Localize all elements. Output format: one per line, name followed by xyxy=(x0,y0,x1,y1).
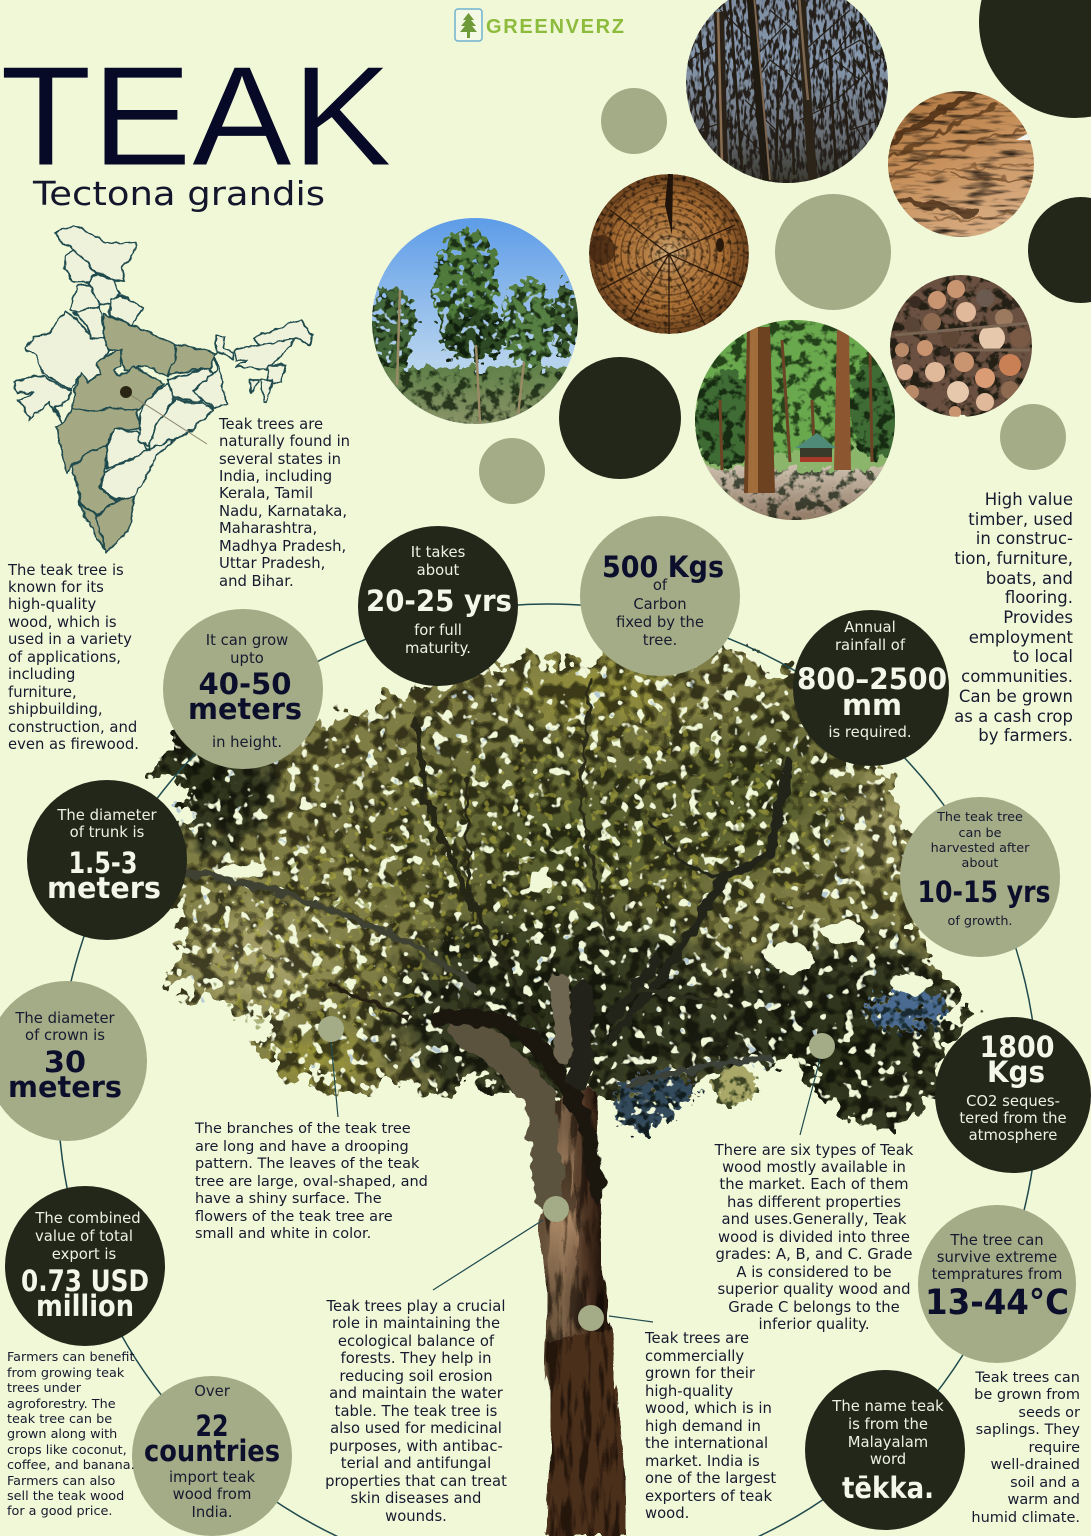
text: growing conditions: seeds or xyxy=(1018,1405,1080,1421)
tree: branches xyxy=(186,680,790,1195)
photo: teak bark texture xyxy=(885,88,1037,240)
stat: tree height xyxy=(163,609,323,769)
stat: name origin: word xyxy=(870,1451,906,1468)
text: commercial demand: high demand in xyxy=(645,1418,761,1435)
text: ecological role: terial and antifungal xyxy=(341,1455,491,1472)
text: uses of teak wood: shipbuilding, xyxy=(8,701,103,718)
text: agroforestry benefits: agroforestry. The xyxy=(7,1397,116,1412)
stat: harvest time: about xyxy=(962,856,998,871)
text: branches and leaves: The branches of the teak tree xyxy=(194,1121,411,1137)
text: growing conditions: require xyxy=(1028,1440,1080,1456)
text: natural range in India: Maharashtra, xyxy=(219,520,317,537)
tree: large open gaps xyxy=(214,862,930,995)
text: growing conditions: humid climate. xyxy=(971,1510,1080,1526)
text: growing conditions: Teak trees can xyxy=(974,1370,1080,1386)
text: natural range in India: naturally found in xyxy=(219,433,350,450)
tree: yellow-green leaf highlights xyxy=(220,700,860,1060)
stat: name origin: tēkka. xyxy=(842,1471,934,1505)
stat: time to maturity: It takes xyxy=(411,544,465,561)
text: economic value: High value xyxy=(985,490,1073,509)
text: uses of teak wood: furniture, xyxy=(8,684,77,701)
stat: time to maturity: about xyxy=(417,562,460,579)
stat: temperature range: The tree can xyxy=(949,1232,1044,1249)
photo: bare forest trees xyxy=(686,0,888,184)
text: economic value: Provides xyxy=(1003,608,1073,627)
stat: carbon fixed: 500 Kgs xyxy=(602,550,724,584)
stat: name origin: is from the xyxy=(848,1416,928,1433)
text: natural range in India: several states in xyxy=(219,451,341,468)
text: types of teak wood: Grade C belongs to the xyxy=(728,1299,900,1316)
text: ecological role: properties that can treat xyxy=(325,1473,507,1490)
text: natural range in India: Madhya Pradesh, xyxy=(219,538,346,555)
stat: name origin: The name teak xyxy=(831,1398,944,1415)
text: economic value: flooring. xyxy=(1005,588,1073,607)
stat: trunk diameter: The diameter xyxy=(56,807,158,824)
tree: trunk xyxy=(538,1090,627,1536)
stat: crown diameter: The diameter xyxy=(14,1010,116,1027)
stat: temperature range xyxy=(918,1205,1076,1363)
text: commercial demand: wood, which is in xyxy=(645,1400,772,1417)
text: growing conditions: be grown from xyxy=(974,1387,1080,1403)
stat: harvest time: 10-15 yrs xyxy=(918,875,1050,909)
callout dot: wood types xyxy=(800,1033,835,1135)
stat: harvest time: can be xyxy=(958,826,1002,841)
stat: temperature range: 13-44°C xyxy=(925,1283,1069,1323)
text: natural range in India: Nadu, Karnataka, xyxy=(219,503,347,520)
decorative circle: large sage xyxy=(775,194,891,310)
text: growing conditions: saplings. They xyxy=(976,1422,1080,1438)
stat: crown diameter: meters xyxy=(8,1070,122,1104)
stat: tree height: upto xyxy=(230,650,264,667)
stat: export value: 0.73 USD xyxy=(21,1264,149,1298)
text: natural range in India: and Bihar. xyxy=(219,573,294,590)
stat: time to maturity: maturity. xyxy=(405,640,471,657)
stat: CO2 sequestered: atmosphere xyxy=(969,1127,1057,1144)
text: natural range in India: Kerala, Tamil xyxy=(219,485,313,502)
stat: harvest time xyxy=(900,797,1060,957)
stat: time to maturity: 20-25 yrs xyxy=(366,584,512,618)
tree: dark blue shadow leaves xyxy=(615,1070,700,1135)
text: ecological role: forests. They help in xyxy=(341,1350,491,1367)
stat: annual rainfall: Annual xyxy=(844,619,896,636)
tree: small pale cluster right of trunk xyxy=(713,1065,757,1105)
decorative circle: top-right dark xyxy=(979,0,1091,118)
stat: annual rainfall: rainfall of xyxy=(835,637,906,654)
callout dot: ecology xyxy=(433,1196,569,1290)
stat: annual rainfall: mm xyxy=(842,688,902,722)
stat: tree height: meters xyxy=(188,692,302,726)
stat: time to maturity: for full xyxy=(414,622,462,639)
text: ecological role: also used for medicinal xyxy=(330,1420,502,1437)
text: commercial demand: grown for their xyxy=(645,1365,756,1382)
text: economic value: employment xyxy=(969,628,1074,647)
text: commercial demand: wood. xyxy=(645,1505,689,1522)
text: agroforestry benefits: Farmers can benefit xyxy=(7,1350,135,1365)
text: types of teak wood: superior quality wood and xyxy=(717,1281,911,1298)
stat: name origin xyxy=(805,1370,965,1530)
text: ecological role: skin diseases and xyxy=(351,1490,481,1507)
text: types of teak wood: wood mostly available in xyxy=(722,1159,906,1176)
stat: carbon fixed: fixed by the xyxy=(616,614,704,631)
photo: wood cross-section rings xyxy=(589,174,749,334)
text: commercial demand: commercially xyxy=(645,1348,744,1365)
connecting ring between stat circles xyxy=(58,604,1038,1536)
text: branches and leaves: are long and have a drooping xyxy=(195,1139,409,1155)
stat: CO2 sequestered: 1800 xyxy=(980,1030,1054,1064)
stat: importing countries: wood from xyxy=(173,1486,251,1503)
stat: annual rainfall xyxy=(793,610,949,766)
logo: Greenverz: GREENVERZ xyxy=(486,16,624,38)
stat: importing countries: Over xyxy=(194,1383,231,1400)
text: commercial demand: high-quality xyxy=(645,1383,733,1400)
text: types of teak wood: There are six types of Teak xyxy=(714,1142,914,1159)
text: economic value: tion, furniture, xyxy=(954,549,1073,568)
subtitle: Tectona grandis xyxy=(32,174,325,213)
stat: importing countries: import teak xyxy=(169,1469,255,1486)
text: uses of teak wood: used in a variety xyxy=(8,631,132,648)
text: uses of teak wood: high-quality xyxy=(8,596,96,613)
stat: CO2 sequestered: tered from the xyxy=(959,1110,1067,1127)
stat: CO2 sequestered: Kgs xyxy=(987,1055,1045,1089)
map: India with teak states highlighted xyxy=(13,225,313,553)
text: uses of teak wood: including xyxy=(8,666,75,683)
text: uses of teak wood: The teak tree is xyxy=(7,562,124,579)
decorative circle: dark under photos xyxy=(559,357,681,479)
text: economic value: boats, and xyxy=(986,569,1073,588)
text: branches and leaves: have a shiny surface. The xyxy=(195,1191,382,1207)
text: uses of teak wood: construction, and xyxy=(8,719,137,736)
text: commercial demand: market. India is xyxy=(645,1453,760,1470)
stat: export value: million xyxy=(36,1289,134,1323)
text: types of teak wood: inferior quality. xyxy=(758,1316,870,1333)
text: agroforestry benefits: Farmers can also xyxy=(7,1474,116,1489)
text: ecological role: wounds. xyxy=(385,1508,447,1525)
text: agroforestry benefits: teak tree can be xyxy=(7,1412,112,1427)
text: ecological role: reducing soil erosion xyxy=(339,1368,493,1385)
stat: crown diameter: 30 xyxy=(44,1045,86,1079)
text: uses of teak wood: even as firewood. xyxy=(8,736,139,753)
stat: carbon fixed xyxy=(580,516,740,676)
text: economic value: by farmers. xyxy=(978,726,1073,745)
text: natural range in India: Teak trees are xyxy=(218,416,323,433)
decorative circle: right dark xyxy=(1028,197,1091,303)
tree: blue leaf fringe right xyxy=(865,988,945,1032)
stat: name origin: Malayalam xyxy=(848,1434,928,1451)
photo: teak park with shelter xyxy=(695,320,895,520)
stat: carbon fixed: of xyxy=(653,577,668,594)
text: types of teak wood: the market. Each of them xyxy=(719,1176,909,1193)
callout dot: branches xyxy=(318,1016,344,1117)
text: agroforestry benefits: trees under xyxy=(7,1381,82,1396)
stat: trunk diameter: meters xyxy=(47,871,161,905)
text: ecological role: and maintain the water xyxy=(329,1385,504,1402)
text: branches and leaves: tree are large, oval-shaped, and xyxy=(195,1174,428,1190)
text: growing conditions: warm and xyxy=(1008,1492,1080,1508)
text: commercial demand: exporters of teak xyxy=(645,1488,772,1505)
text: uses of teak wood: of applications, xyxy=(8,649,121,666)
stat: export value: The combined xyxy=(34,1210,141,1227)
text: agroforestry benefits: crops like coconut, xyxy=(7,1443,127,1458)
text: growing conditions: soil and a xyxy=(1010,1475,1080,1491)
stat: importing countries: India. xyxy=(191,1504,233,1521)
text: branches and leaves: small and white in color. xyxy=(195,1226,371,1242)
text: commercial demand: the international xyxy=(645,1435,768,1452)
stat: importing countries: countries xyxy=(144,1434,280,1468)
text: economic value: Can be grown xyxy=(959,687,1073,706)
text: agroforestry benefits: sell the teak wood xyxy=(7,1489,124,1504)
text: agroforestry benefits: coffee, and banana. xyxy=(7,1458,135,1473)
stat: export value: value of total xyxy=(35,1228,133,1245)
stat: trunk diameter xyxy=(27,780,187,940)
stat: crown diameter: of crown is xyxy=(25,1027,105,1044)
text: ecological role: Teak trees play a crucial xyxy=(326,1298,505,1315)
callout dot: commercial value xyxy=(578,1305,653,1331)
stat: export value: export is xyxy=(52,1246,116,1263)
stat: harvest time: harvested after xyxy=(931,841,1030,856)
stat: export value xyxy=(5,1186,165,1346)
stat: harvest time: The teak tree xyxy=(936,810,1023,825)
photo: young teak saplings xyxy=(370,218,580,428)
stat: CO2 sequestered: CO2 seques- xyxy=(966,1093,1060,1110)
title: TEAK xyxy=(0,37,392,196)
text: ecological role: purposes, with antibac- xyxy=(329,1438,503,1455)
stat: carbon fixed: Carbon xyxy=(633,596,687,613)
stat: annual rainfall: is required. xyxy=(828,724,912,741)
stat: CO2 sequestered xyxy=(935,1017,1091,1173)
tree: leaf mass xyxy=(145,644,984,1134)
decorative circle: sage top xyxy=(601,88,667,154)
text: natural range in India: India, including xyxy=(219,468,332,485)
text: types of teak wood: wood is divided into three xyxy=(718,1229,910,1246)
text: branches and leaves: flowers of the teak tree are xyxy=(195,1209,393,1225)
stat: time to maturity xyxy=(358,526,518,686)
text: ecological role: role in maintaining the xyxy=(332,1315,500,1332)
text: growing conditions: well-drained xyxy=(991,1457,1080,1473)
stat: crown diameter xyxy=(0,981,147,1141)
logo: Greenverz xyxy=(455,9,624,41)
decorative circle: sage lower right xyxy=(1000,404,1066,470)
text: types of teak wood: A is considered to be xyxy=(736,1264,892,1281)
tree: pale sky gaps in canopy xyxy=(180,660,930,1070)
tree: canopy and trunk illustration xyxy=(110,640,1010,1536)
stat: importing countries: 22 xyxy=(196,1409,228,1443)
stat: tree height: It can grow xyxy=(206,632,288,649)
text: economic value: timber, used xyxy=(968,510,1073,529)
text: ecological role: table. The teak tree is xyxy=(335,1403,497,1420)
text: agroforestry benefits: for a good price. xyxy=(7,1504,112,1519)
text: branches and leaves: pattern. The leaves of the teak xyxy=(195,1156,420,1172)
text: economic value: as a cash crop xyxy=(954,707,1073,726)
stat: trunk diameter: 1.5-3 xyxy=(68,846,138,880)
text: ecological role: ecological balance of xyxy=(338,1333,495,1350)
text: economic value: in construc- xyxy=(976,529,1073,548)
stat: temperature range: tempratures from xyxy=(932,1266,1062,1283)
stat: tree height: 40-50 xyxy=(198,667,292,701)
text: commercial demand: Teak trees are xyxy=(644,1330,749,1347)
text: commercial demand: one of the largest xyxy=(645,1470,776,1487)
text: uses of teak wood: known for its xyxy=(8,579,104,596)
decorative circle: sage bottom xyxy=(479,438,545,504)
stat: harvest time: of growth. xyxy=(948,914,1012,929)
text: economic value: communities. xyxy=(961,667,1073,686)
stat: temperature range: survive extreme xyxy=(937,1249,1057,1266)
stat: carbon fixed: tree. xyxy=(643,632,677,649)
stat: annual rainfall: 800–2500 xyxy=(797,662,947,696)
text: natural range in India: Uttar Pradesh, xyxy=(219,555,325,572)
stat: trunk diameter: of trunk is xyxy=(70,824,144,841)
stat: importing countries xyxy=(132,1376,292,1536)
text: agroforestry benefits: grown along with xyxy=(7,1427,117,1442)
text: types of teak wood: has different properties xyxy=(727,1194,901,1211)
text: agroforestry benefits: from growing teak xyxy=(7,1366,125,1381)
stat: tree height: in height. xyxy=(212,734,282,751)
photo: stacked timber logs xyxy=(890,275,1032,417)
text: economic value: to local xyxy=(1013,647,1073,666)
text: types of teak wood: grades: A, B, and C. Grade xyxy=(716,1246,912,1263)
text: types of teak wood: and uses.Generally, Teak xyxy=(722,1211,907,1228)
text: uses of teak wood: wood, which is xyxy=(8,614,117,631)
